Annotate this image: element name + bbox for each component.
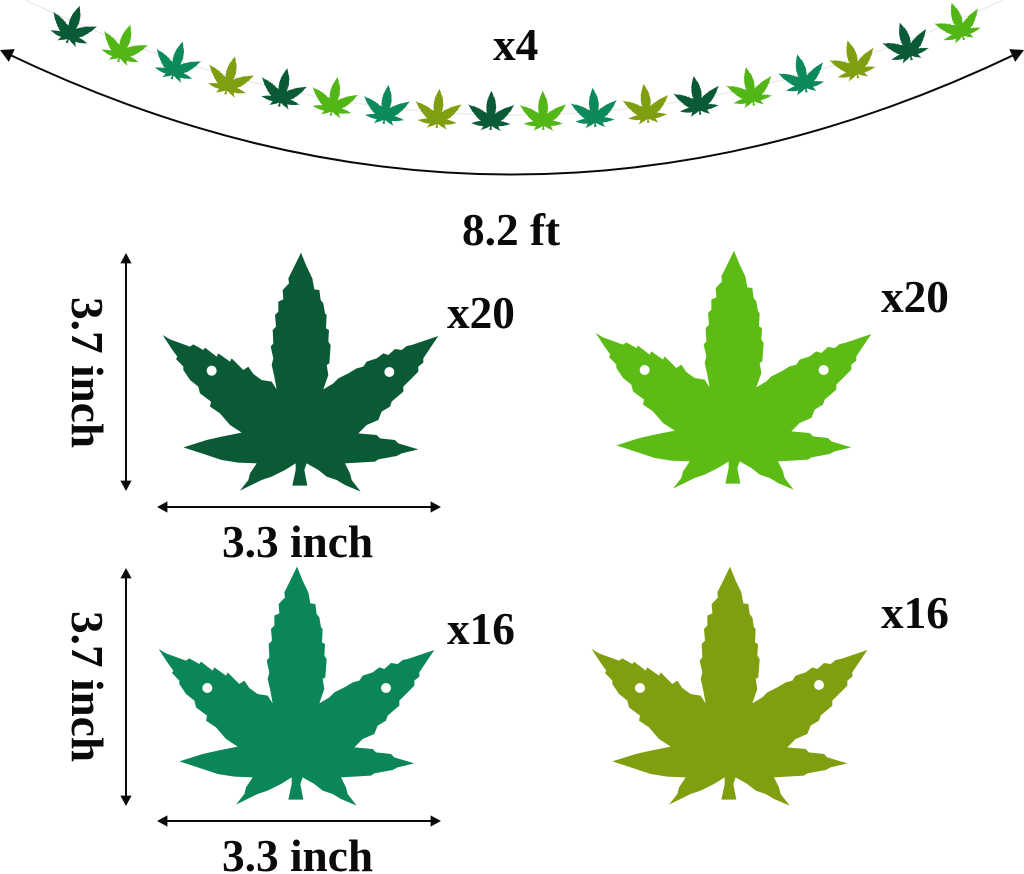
arrow: width, bottom row [157, 815, 441, 827]
leaf: teal green [159, 567, 434, 806]
count: light green: x20 [881, 272, 949, 322]
arrow: width, top row [157, 501, 441, 513]
garland string [25, 0, 1003, 115]
leaf: olive green [592, 567, 867, 806]
garland count label: x4 [493, 20, 538, 70]
arrow: height, bottom row [120, 568, 132, 806]
height label, bottom row: 3.7 inch [62, 611, 112, 762]
count: teal green: x16 [447, 604, 515, 654]
width label, top row: 3.3 inch [222, 517, 373, 567]
count: dark green: x20 [447, 288, 515, 338]
leaf: dark green [163, 253, 438, 492]
arrow: height, top row [120, 253, 132, 491]
garland of leaves [45, 0, 986, 131]
leaf: light green [596, 251, 871, 490]
count: olive green: x16 [881, 588, 949, 638]
garland length label: 8.2 ft [462, 205, 560, 255]
arrow: garland length [0, 44, 1024, 174]
height label, top row: 3.7 inch [62, 297, 112, 448]
